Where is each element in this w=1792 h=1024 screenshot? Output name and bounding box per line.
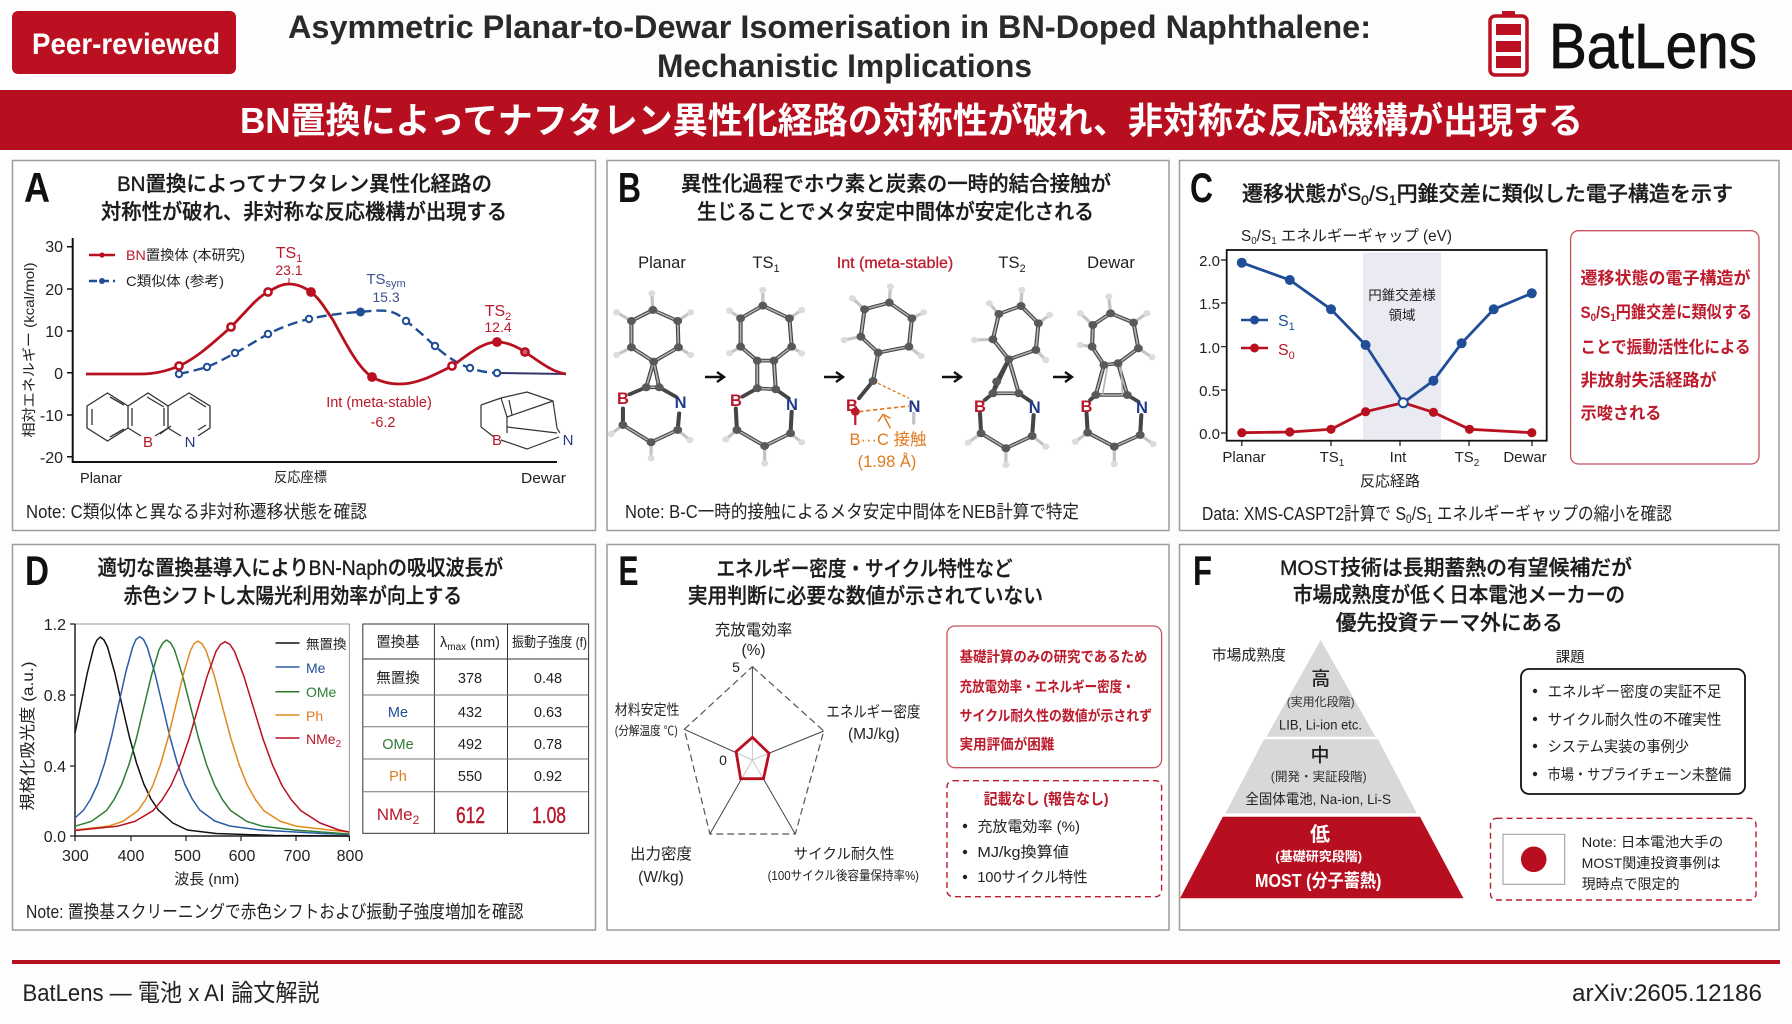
molecules: ball and stick [611, 287, 1153, 465]
legend: 0 [1289, 350, 1295, 362]
panel: A energy profile [12, 160, 596, 530]
table: substituents: 0.92 [534, 769, 562, 785]
chart: radar [615, 621, 920, 886]
pyramid [1180, 640, 1464, 898]
note box with flag: MOST関連投資事例は [1582, 855, 1721, 871]
callout box C [1571, 231, 1759, 464]
table: substituents: 432 [458, 705, 482, 721]
list box: issues: サイクル耐久性の不確実性 [1548, 712, 1721, 728]
axis labels: (100サイクル後容量保持率%) [768, 868, 919, 883]
axis labels: 反応経路 [1360, 473, 1420, 490]
footer: left credit: BatLens — 電池 x AI 論文解説 [22, 980, 320, 1007]
legend: 無置換 [306, 637, 347, 652]
callouts on curve: Int (meta-stable) [326, 395, 432, 411]
table: substituents: NMe [377, 805, 413, 824]
panel: D absorption spectra [12, 544, 596, 930]
tier: high: 高 [1311, 668, 1330, 690]
heading C: 1 [1389, 192, 1397, 208]
panel letter B: B [618, 164, 641, 211]
legend [1241, 313, 1295, 362]
legend [89, 247, 245, 289]
callouts on curve: 15.3 [372, 289, 400, 305]
panel: C energy gap [1180, 160, 1779, 530]
chart: S0/S1 gap: 0.0 [1199, 426, 1220, 443]
note box with flag: Note: 日本電池大手の [1582, 834, 1723, 850]
callout box E: 基礎計算のみの研究であるため [960, 648, 1148, 666]
chart: absorption curves: 0.8 [44, 688, 66, 705]
heading F: 市場成熟度が低く日本電池メーカーの [1293, 584, 1625, 607]
chart: radar: 5 [732, 659, 740, 675]
callouts on curve: 2 [505, 311, 511, 323]
tier: high: (実用化段階) [1287, 694, 1355, 709]
chart: absorption curves: 300 [62, 848, 89, 865]
chart: absorption curves: 800 [337, 848, 363, 865]
panel letter A: A [24, 164, 50, 211]
chart: absorption curves: 400 [118, 848, 144, 865]
note box with flag: 現時点で限定的 [1582, 876, 1680, 892]
column labels [638, 254, 1135, 275]
callout box C: 0 [1591, 312, 1596, 324]
callout box C: /S [1596, 303, 1610, 322]
tier: low: MOST (分子蓄熱) [1255, 871, 1381, 891]
heading E: エネルギー密度・サイクル特性など [716, 558, 1012, 581]
headline banner [0, 90, 1792, 150]
headline banner: BN置換によってナフタレン異性化経路の対称性が破れ、非対称な反応機構が出現する [240, 100, 1583, 141]
footer: arXiv id: arXiv:2605.12186 [1572, 980, 1762, 1007]
list box: issues: システム実装の事例少 [1548, 738, 1689, 756]
chart: S0/S1 gap: 2.0 [1199, 253, 1220, 270]
note C: 1 [1427, 512, 1433, 526]
chart: S0/S1 gap: /S [1257, 228, 1271, 245]
chart: S0/S1 gap: 0 [1251, 236, 1257, 247]
callouts on curve: 12.4 [484, 319, 512, 335]
chart: reaction energy profile: 30 [45, 239, 63, 256]
heading A [101, 173, 507, 224]
legend: NMe [306, 731, 336, 747]
heading B: 異性化過程でホウ素と炭素の一時的結合接触が [681, 173, 1111, 196]
chart: absorption curves [19, 617, 363, 888]
table: substituents: 置換基 [376, 634, 420, 651]
tier: high [1266, 640, 1376, 737]
axis labels: Int [1390, 449, 1407, 466]
chart: S0/S1 gap: 1.0 [1199, 340, 1220, 357]
badge: peer-reviewed [12, 11, 236, 74]
spectrum: NMe2 [75, 642, 349, 832]
atom labels: N [1029, 399, 1041, 417]
chart: absorption curves: 500 [174, 848, 201, 865]
table: substituents: (nm) [466, 635, 500, 651]
table: substituents: 1.08 [532, 802, 566, 828]
molecule: Dewar [1075, 297, 1153, 464]
dashed box: not reported: 充放電効率 (%) [977, 818, 1080, 836]
spectrum: OMe [75, 640, 349, 834]
panel letter D: D [25, 547, 49, 594]
callout: B-C contact: B···C 接触 [850, 430, 926, 449]
axis labels: サイクル耐久性 [794, 846, 894, 863]
table: substituents: 492 [458, 737, 482, 753]
list box: issues: エネルギー密度の実証不足 [1548, 684, 1721, 700]
callouts on curve: TS [485, 303, 505, 320]
axis labels [1222, 449, 1547, 490]
molecule: planar BN-naphthalene [87, 393, 210, 451]
panel letter C: C [1190, 164, 1213, 211]
heading F: MOST技術は長期蓄熱の有望候補だが [1280, 557, 1632, 580]
legend: C類似体 (参考) [126, 273, 224, 289]
legend: 2 [336, 739, 342, 750]
chart: reaction energy profile [21, 238, 573, 487]
axis labels: TS [1455, 449, 1474, 466]
chart: S0/S1 gap: 領域 [1388, 308, 1416, 323]
note C: 0 [1406, 512, 1412, 526]
chart: S0/S1 gap [1199, 227, 1547, 490]
molecule: planar BN-naphthalene: B [143, 434, 153, 451]
callout: B-C contact: (1.98 Å) [858, 452, 916, 471]
atom labels: N [786, 396, 798, 414]
atom labels [617, 390, 1148, 417]
arrows between molecules [705, 372, 1072, 382]
note A: Note: C類似体と異なる非対称遷移状態を確認 [26, 502, 367, 522]
callout box E [947, 626, 1162, 768]
column labels: Int (meta-stable) [837, 255, 953, 272]
axis labels: (W/kg) [638, 869, 684, 886]
column labels: Planar [638, 254, 686, 272]
logo: BatLens battery and wordmark: BatLens [1549, 10, 1757, 82]
atom labels: N [675, 394, 687, 412]
callout box C: 円錐交差に類似する [1616, 303, 1752, 322]
axis labels: Planar [80, 470, 122, 487]
chart: S0/S1 gap: 円錐交差様 [1368, 288, 1436, 303]
chart: radar: 0 [719, 752, 727, 768]
legend [276, 637, 347, 750]
atom labels: N [909, 398, 920, 416]
column labels: 1 [773, 263, 780, 275]
axis labels: 充放電効率 [715, 621, 792, 639]
heading E: 実用判断に必要な数値が示されていない [688, 585, 1043, 608]
chart: reaction energy profile: 20 [45, 282, 63, 299]
spectrum: Ph [75, 641, 349, 832]
axis labels: (MJ/kg) [848, 726, 900, 743]
table: substituents: 612 [456, 802, 485, 828]
callout box C: 示唆される [1580, 404, 1662, 423]
tier: middle: 中 [1310, 744, 1330, 766]
column labels: TS [752, 254, 773, 272]
axis labels: 材料安定性 [615, 702, 680, 719]
molecule: planar BN-naphthalene: N [185, 434, 195, 451]
molecule: Dewar isomer [481, 392, 573, 449]
callouts on curve [275, 245, 512, 431]
tier: middle [1226, 739, 1417, 813]
table: substituents [363, 624, 589, 833]
molecule: Dewar isomer: B [492, 432, 502, 449]
note B: Note: B-C一時的接触によるメタ安定中間体をNEB計算で特定 [625, 502, 1079, 522]
table: substituents: Me [388, 705, 408, 721]
chart: reaction energy profile: -10 [40, 408, 63, 425]
callouts on curve: 1 [296, 253, 302, 265]
callout box C: 非放射失活経路が [1580, 370, 1716, 390]
note C: エネルギーギャップの縮小を確認 [1432, 504, 1672, 524]
atom labels: N [1136, 399, 1148, 417]
atom labels: B [1081, 398, 1093, 416]
note C: /S [1412, 504, 1427, 524]
title: Mechanistic Implications [657, 48, 1032, 84]
heading A: BN置換によってナフタレン異性化経路の [117, 173, 492, 196]
axis label: market maturity: 市場成熟度 [1212, 647, 1286, 664]
heading: issues: 課題 [1556, 650, 1585, 666]
heading D: 適切な置換基導入によりBN-Naphの吸収波長が [98, 557, 503, 580]
callouts on curve: 23.1 [275, 262, 303, 278]
axis labels: Planar [1222, 449, 1266, 466]
heading F [1280, 557, 1632, 635]
callout box E: 実用評価が困難 [960, 736, 1055, 754]
axis labels: 2 [1474, 458, 1480, 469]
chart: S0/S1 gap: 1.5 [1199, 296, 1220, 313]
table: substituents: 0.48 [534, 671, 562, 687]
chart: absorption curves: 規格化吸光度 (a.u.) [19, 662, 37, 810]
title [288, 9, 1371, 84]
dashed box: not reported: 記載なし (報告なし) [984, 790, 1109, 808]
dashed box: not reported: MJ/kg換算値 [977, 843, 1069, 861]
atom labels: B [730, 392, 742, 410]
list box: issues: 市場・サプライチェーン未整備 [1548, 766, 1731, 784]
chart: absorption curves: 0.4 [44, 759, 66, 776]
axis labels [615, 621, 920, 886]
chart: reaction energy profile: 0 [54, 366, 63, 383]
badge: peer-reviewed: Peer-reviewed [32, 28, 220, 61]
spectrum: unsubstituted [75, 637, 349, 836]
atom labels: B [846, 397, 858, 415]
callouts on curve: -6.2 [370, 415, 396, 431]
heading B [681, 173, 1111, 224]
chart: S0/S1 gap: 1 [1271, 236, 1277, 247]
chart: reaction energy profile: 10 [45, 324, 63, 341]
spectrum: Me [75, 637, 349, 834]
table: substituents: 2 [413, 813, 420, 827]
heading D: 赤色シフトし太陽光利用効率が向上する [124, 585, 462, 608]
heading C: 遷移状態がS [1242, 183, 1361, 206]
panel: E radar [607, 544, 1169, 930]
heading C: 0 [1361, 192, 1369, 208]
legend: BN置換体 (本研究) [126, 247, 245, 263]
chart: S0/S1 gap: S [1241, 228, 1251, 245]
chart: S0/S1 gap: エネルギーギャップ (eV) [1277, 227, 1452, 245]
heading A: 対称性が破れ、非対称な反応機構が出現する [101, 201, 507, 224]
callout box E: サイクル耐久性の数値が示されず [960, 707, 1152, 725]
callout box C: S [1580, 303, 1592, 322]
note box with flag [1490, 818, 1756, 900]
legend: S [1278, 342, 1289, 359]
heading F: 優先投資テーマ外にある [1336, 612, 1563, 635]
callout box C: 遷移状態の電子構造が [1580, 268, 1750, 288]
callout box E: 充放電効率・エネルギー密度・ [960, 678, 1135, 696]
panel letter F: F [1193, 547, 1212, 594]
table: substituents: 550 [458, 769, 482, 785]
callouts on curve: TS [366, 271, 386, 288]
axis labels: 1 [1339, 458, 1345, 469]
column labels: Dewar [1087, 254, 1135, 272]
atom labels: B [617, 390, 629, 408]
chart: absorption curves: 波長 (nm) [174, 871, 239, 888]
heading E [688, 558, 1043, 608]
axis labels [80, 469, 566, 487]
legend: S [1278, 313, 1289, 330]
molecule: planar [611, 293, 691, 458]
icon: Japan flag [1503, 834, 1565, 884]
axis labels: (分解温度 ℃) [615, 723, 678, 738]
axis labels: エネルギー密度 [826, 703, 920, 721]
panel: B molecular pathway [607, 160, 1169, 530]
table: substituents: 0.63 [534, 705, 562, 721]
dashed box: not reported: 100サイクル特性 [977, 869, 1088, 886]
heading C: 円錐交差に類似した電子構造を示す [1397, 183, 1733, 206]
callouts on curve: sym [386, 278, 406, 290]
legend: OMe [306, 684, 337, 700]
tier: middle: 全固体電池, Na-ion, Li-S [1245, 791, 1391, 807]
table: substituents: 無置換 [376, 670, 420, 687]
axis labels: (%) [741, 642, 766, 659]
table: substituents: λ [440, 635, 447, 651]
note D: Note: 置換基スクリーニングで赤色シフトおよび振動子強度増加を確認 [26, 902, 524, 922]
chart: absorption curves: 0.0 [44, 829, 66, 846]
chart: absorption curves: 700 [284, 848, 310, 865]
callout box C: 1 [1610, 312, 1616, 324]
panel letter E: E [618, 547, 638, 594]
table: substituents: 378 [458, 671, 482, 687]
chart: S0/S1 gap: 0.5 [1199, 383, 1220, 400]
column labels: 2 [1019, 263, 1026, 275]
dashed box: not reported [947, 781, 1162, 897]
tier: low: 低 [1310, 823, 1330, 846]
molecule: TS1 [726, 290, 802, 463]
tier: low: (基礎研究段階) [1275, 849, 1362, 864]
heading B: 生じることでメタ安定中間体が安定化される [697, 201, 1094, 224]
axis labels: Dewar [521, 470, 566, 487]
table: substituents: OMe [382, 737, 414, 753]
table: substituents: Ph [389, 769, 407, 785]
callouts on curve: TS [276, 245, 296, 262]
heading D [98, 557, 503, 608]
chart: absorption curves: 600 [229, 848, 255, 865]
title: Asymmetric Planar-to-Dewar Isomerisation in BN-Doped Naphthalene: [288, 9, 1371, 45]
tier: middle: (開発・実証段階) [1271, 769, 1367, 784]
tier: low [1180, 817, 1464, 898]
panel: F market maturity [1180, 544, 1779, 930]
axis labels: TS [1320, 449, 1339, 466]
tier: high: LIB, Li-ion etc. [1279, 716, 1362, 732]
footer rule [12, 960, 1780, 964]
chart: reaction energy profile: -20 [40, 450, 63, 467]
molecule: TS2 [968, 290, 1050, 465]
axis labels: 反応座標 [274, 469, 327, 485]
axis labels: 出力密度 [630, 845, 692, 863]
table: substituents: max [447, 642, 466, 653]
legend: Me [306, 660, 326, 676]
chart: absorption curves: 1.2 [44, 617, 66, 634]
chart: reaction energy profile: 相対エネルギー (kcal/mol) [21, 262, 37, 438]
table: substituents: 振動子強度 (f) [512, 634, 587, 650]
molecule: Dewar isomer: N [563, 432, 573, 449]
list box: issues [1521, 669, 1745, 794]
atom labels: B [974, 398, 986, 416]
legend: Ph [306, 708, 323, 724]
callout box C: ことで振動活性化による [1580, 338, 1750, 357]
note C: Data: XMS-CASPT2計算で S [1202, 504, 1436, 524]
column labels: TS [998, 254, 1019, 272]
legend: 1 [1289, 321, 1295, 333]
heading C: /S [1369, 183, 1389, 206]
callout: B-C contact [850, 430, 926, 471]
molecule: Int with B-C contact [844, 287, 924, 428]
table: substituents: 0.78 [534, 737, 562, 753]
axis labels: Dewar [1503, 449, 1547, 466]
